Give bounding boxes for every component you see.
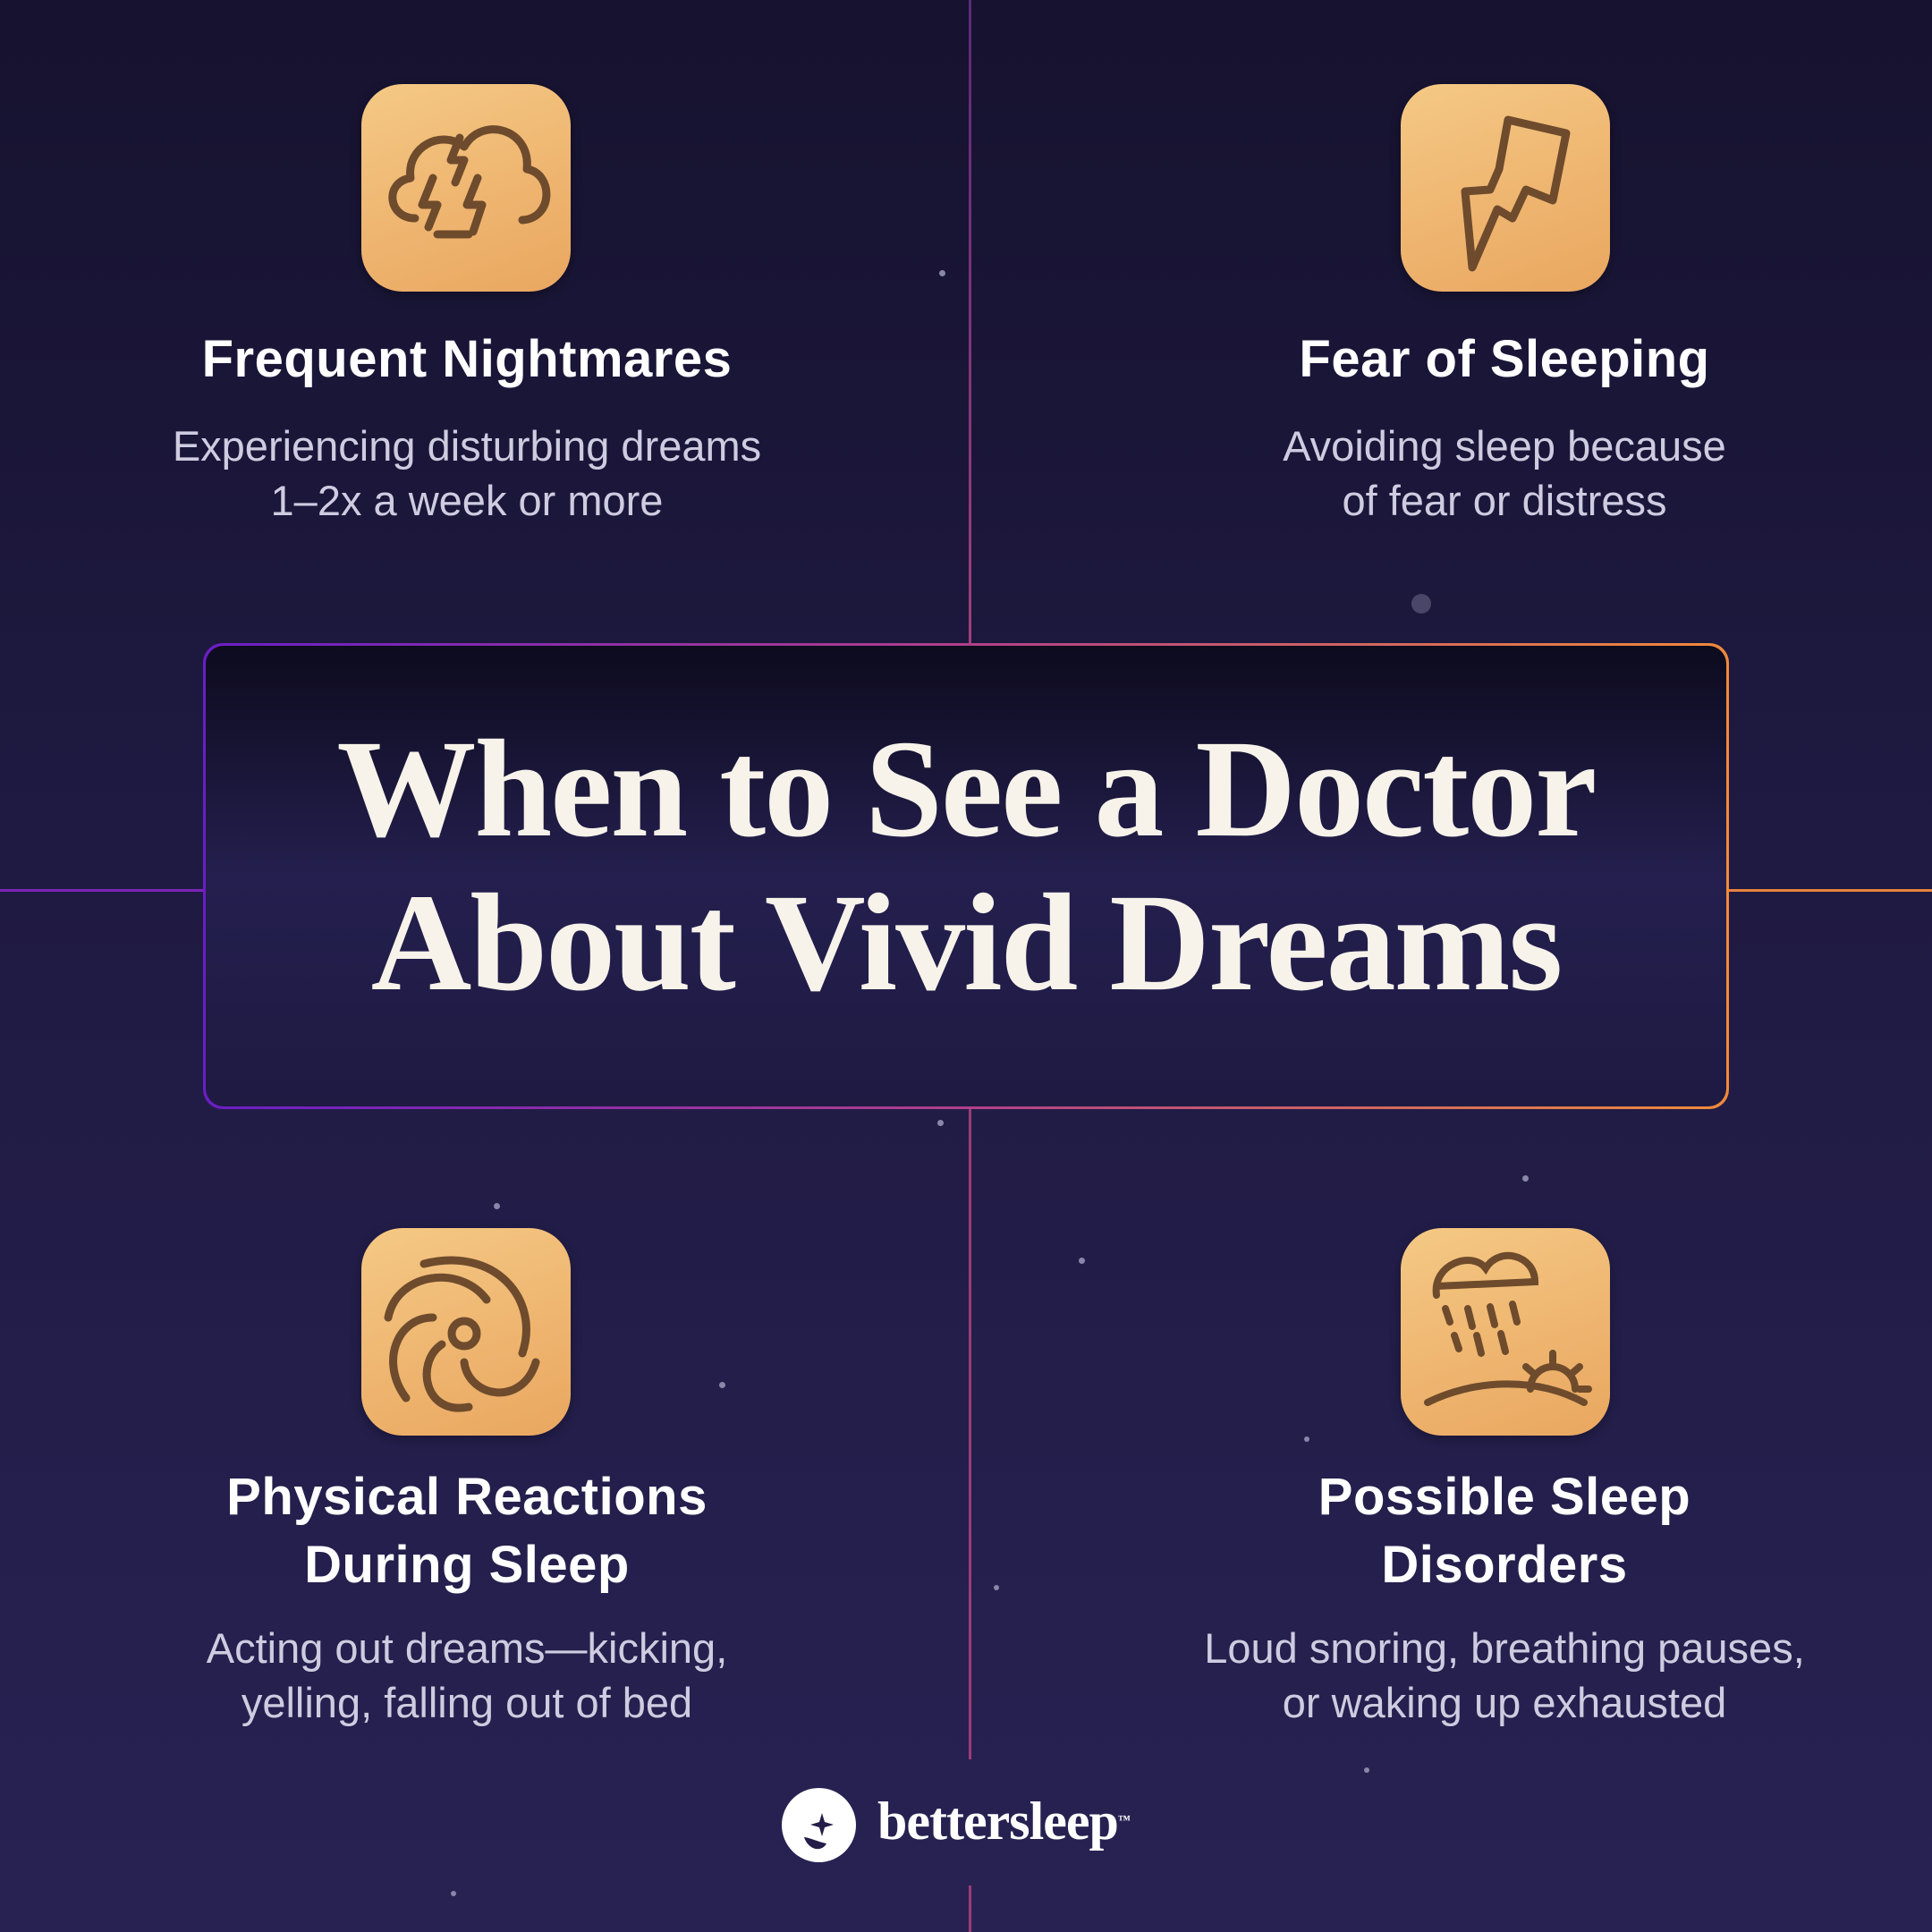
heading: Disorders	[1381, 1536, 1628, 1594]
text: Acting out dreams—kicking,	[207, 1624, 727, 1672]
text	[1283, 422, 1726, 524]
text	[173, 422, 761, 524]
stars	[939, 270, 945, 276]
logo	[782, 1788, 1131, 1862]
heading: Physical Reactions	[226, 1468, 708, 1526]
icon: spiral	[361, 1228, 571, 1436]
panel: frequent nightmares	[173, 330, 761, 524]
center title box	[203, 643, 1729, 1109]
icon: storm cloud	[361, 84, 571, 292]
text: yelling, falling out of bed	[242, 1679, 692, 1726]
heading	[226, 1468, 708, 1594]
title	[336, 711, 1596, 1020]
text: 1–2x a week or more	[271, 477, 663, 524]
text: or waking up exhausted	[1283, 1679, 1726, 1726]
heading: Possible Sleep	[1318, 1468, 1690, 1526]
icon: logo circle	[782, 1788, 856, 1862]
heading: Frequent Nightmares	[202, 330, 732, 388]
text	[1204, 1624, 1805, 1726]
panel: sleep disorders	[1204, 1468, 1805, 1726]
vertical divider lines	[969, 0, 971, 643]
heading	[1318, 1468, 1690, 1594]
panel: physical reactions	[206, 1468, 727, 1726]
heading: During Sleep	[304, 1536, 630, 1594]
wordmark: bettersleep™	[877, 1792, 1130, 1851]
icon: rain sun	[1401, 1228, 1610, 1436]
title: About Vivid Dreams	[371, 865, 1561, 1020]
text	[206, 1624, 727, 1726]
text: of fear or distress	[1342, 477, 1667, 524]
title: When to See a Doctor	[336, 711, 1596, 866]
heading: Fear of Sleeping	[1299, 330, 1710, 388]
panel: fear of sleeping	[1283, 330, 1726, 524]
text: Avoiding sleep because	[1283, 422, 1726, 470]
icon: lightning	[1401, 84, 1610, 292]
text: Experiencing disturbing dreams	[173, 422, 761, 470]
text: Loud snoring, breathing pauses,	[1204, 1624, 1805, 1672]
